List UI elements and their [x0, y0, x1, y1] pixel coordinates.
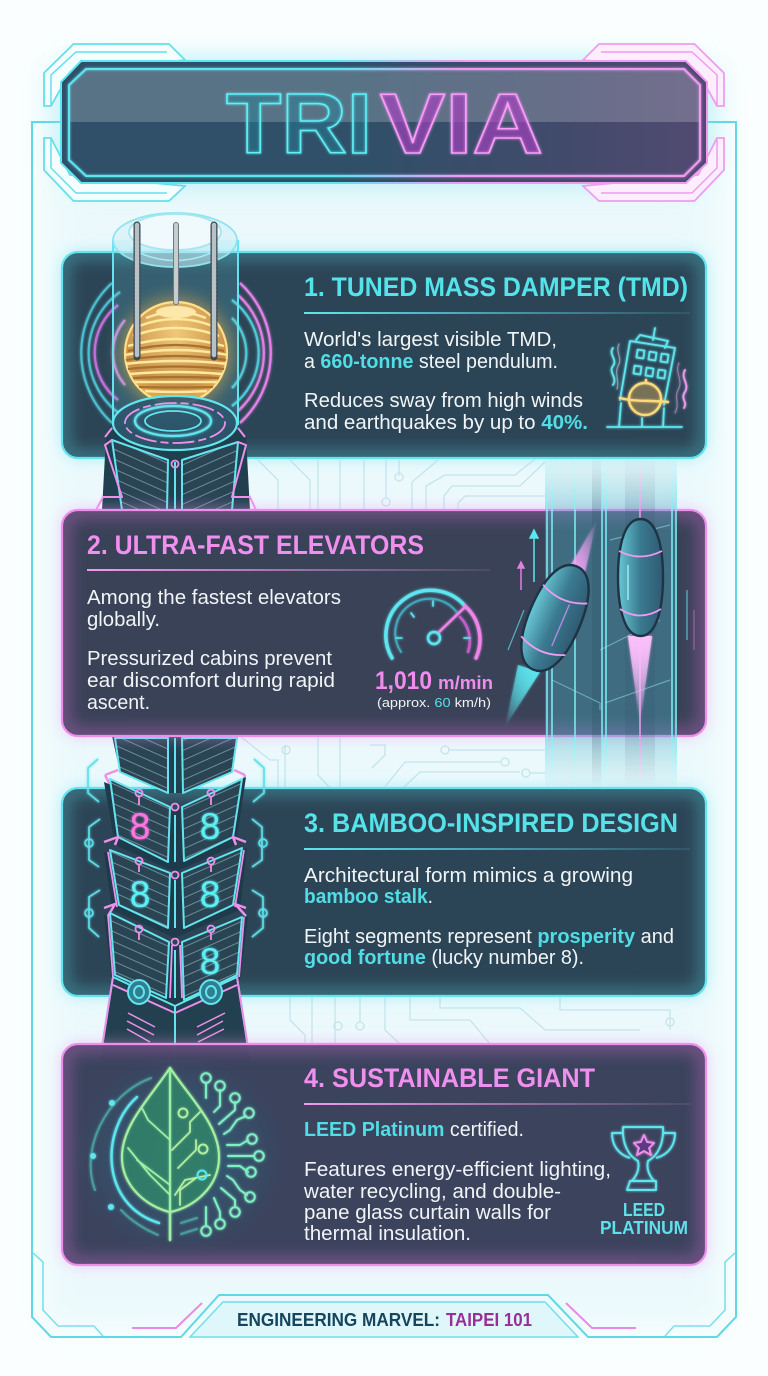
heading 1: 1. TUNED MASS DAMPER (TMD)	[304, 272, 688, 302]
body 4: thermal insulation.	[304, 1223, 471, 1245]
leed platinum label	[600, 1200, 688, 1238]
speed value: 1,010	[375, 667, 432, 695]
lucky number 8 glyphs: 8	[130, 806, 150, 847]
capsule: tilted	[509, 556, 601, 680]
body 2	[87, 587, 341, 714]
segment: lower	[104, 904, 248, 1006]
segment above bamboo section	[112, 736, 238, 793]
capsule speed trails	[505, 520, 694, 727]
title: TRI	[226, 77, 372, 172]
body 4: pane glass curtain walls for	[304, 1202, 551, 1224]
damper sphere	[120, 297, 232, 409]
body 2: ascent.	[87, 692, 150, 714]
panel 1 text	[304, 272, 690, 434]
body 4: Features energy-efficient lighting,	[304, 1159, 611, 1181]
segment: upper	[104, 770, 246, 872]
panel 3 background	[62, 788, 706, 996]
body 4: LEED Platinum certified.	[304, 1119, 524, 1141]
lucky number 8 glyphs: 8	[130, 874, 150, 915]
body 1: Reduces sway from high winds	[304, 390, 583, 412]
icon: trophy	[612, 1127, 675, 1190]
body 4	[303, 1119, 611, 1245]
corner brackets	[44, 44, 185, 201]
body 3	[304, 865, 674, 969]
body 1: and earthquakes by up to 40%.	[304, 412, 588, 434]
leed platinum label: PLATINUM	[600, 1218, 688, 1238]
knots and nodes	[136, 790, 214, 946]
speed value: m/min	[438, 673, 493, 693]
sound arcs around damper	[81, 283, 271, 423]
body 3: bamboo stalk.	[304, 886, 433, 908]
panel 2: ultra-fast elevators	[62, 510, 706, 736]
heading 2: 2. ULTRA-FAST ELEVATORS	[87, 530, 424, 560]
leed platinum label: LEED	[623, 1200, 665, 1220]
speed value	[375, 667, 493, 710]
body 1: a 660-tonne steel pendulum.	[304, 351, 558, 373]
body 2: ear discomfort during rapid	[87, 670, 335, 692]
capsule: vertical	[618, 519, 663, 636]
footer plaque: TAIPEI 101	[446, 1310, 532, 1330]
body 2: Among the fastest elevators	[87, 587, 341, 609]
body 4: water recycling, and double-	[303, 1181, 561, 1203]
side brackets	[85, 759, 267, 937]
lucky number 8 glyphs: 8	[200, 874, 220, 915]
glass cylinder	[113, 213, 238, 425]
icon: swaying building with damper	[607, 328, 686, 427]
steel cables	[137, 225, 214, 357]
circuit traces background	[240, 455, 674, 1044]
body 3: Eight segments represent prosperity and	[304, 926, 674, 948]
body 2: globally.	[87, 609, 160, 631]
speed arrows	[518, 530, 538, 590]
damper base ring	[113, 396, 237, 450]
footer plaque	[132, 1302, 636, 1337]
speedometer	[386, 590, 480, 658]
body 1: World's largest visible TMD,	[304, 329, 557, 351]
base discs	[128, 980, 222, 1004]
title	[226, 77, 543, 172]
panel 3 text	[304, 808, 690, 969]
footer text: ENGINEERING MARVEL:	[237, 1310, 440, 1330]
tower base	[100, 977, 250, 1060]
lucky number 8 glyphs	[130, 806, 220, 982]
segment: middle	[104, 837, 247, 938]
body 3: Architectural form mimics a growing	[304, 865, 633, 887]
elevator shaft	[545, 455, 677, 790]
body 1	[304, 329, 588, 434]
bamboo segments	[100, 770, 250, 1060]
speed value: (approx. 60 km/h)	[377, 695, 491, 710]
panel 4: sustainable giant	[62, 1044, 706, 1265]
upper tower segment	[96, 428, 256, 510]
body 3: good fortune (lucky number 8).	[304, 947, 584, 969]
title: VIA	[380, 77, 543, 172]
heading 4: 4. SUSTAINABLE GIANT	[304, 1063, 595, 1093]
lucky number 8 glyphs: 8	[200, 806, 220, 847]
panel 1 background	[62, 252, 706, 458]
lucky number 8 glyphs: 8	[200, 941, 220, 982]
header: title plate	[44, 44, 724, 201]
heading 3: 3. BAMBOO-INSPIRED DESIGN	[304, 808, 678, 838]
tower illustration	[81, 213, 271, 1060]
icon: circuit leaf	[90, 1068, 264, 1240]
elevator capsules	[505, 519, 694, 727]
body 2: Pressurized cabins prevent	[87, 648, 332, 670]
